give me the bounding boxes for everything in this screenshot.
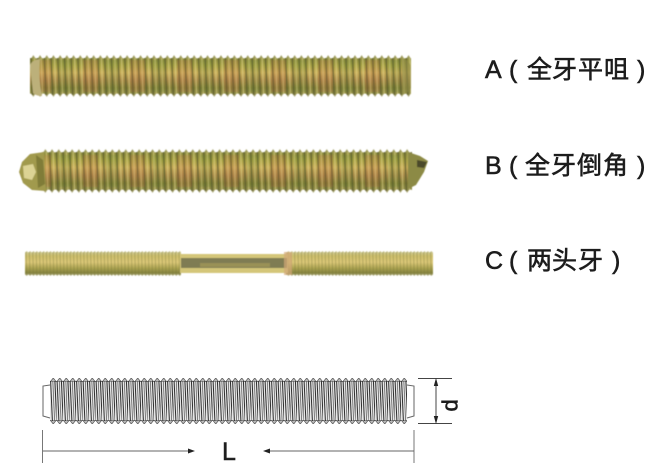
label C: C(两头牙) (485, 247, 620, 275)
right end cap (407, 385, 414, 418)
dimension L (42, 430, 414, 466)
dimension d (418, 378, 462, 424)
threaded body (50, 378, 407, 424)
label A: A(全牙平咀) (485, 56, 645, 84)
dimension d: d (438, 399, 462, 412)
technical drawing of the stud (43, 378, 414, 424)
left end cap (43, 385, 50, 418)
screw C: double-ended thread (25, 251, 433, 276)
screw A: full thread, flat ends (30, 55, 411, 97)
dimension L: L (222, 438, 236, 466)
screw B: full thread, chamfered ends (19, 149, 428, 193)
label B: B(全牙倒角) (485, 152, 645, 180)
